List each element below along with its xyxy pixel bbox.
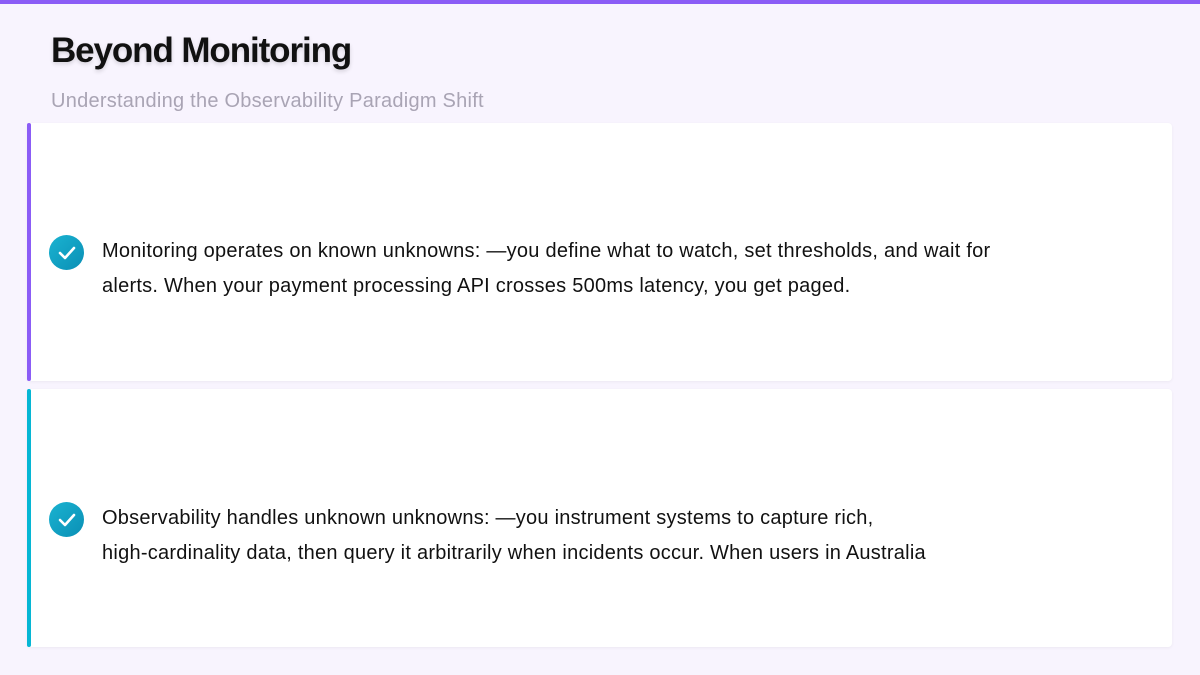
title: Beyond Monitoring — [51, 31, 351, 70]
text: monitoring — [102, 240, 990, 297]
text: observability — [102, 507, 926, 564]
panel: monitoring — [27, 123, 1172, 381]
icon: check — [49, 502, 84, 537]
text: observability: high-cardinality data, then query it arbitrarily when incidents occur. When users in Australia — [102, 542, 926, 564]
icon: check — [49, 235, 84, 270]
subtitle: Understanding the Observability Paradigm Shift — [51, 90, 484, 112]
text: observability: Observability handles unknown unknowns: —you instrument systems to capture rich, — [102, 507, 873, 529]
text: monitoring: Monitoring operates on known unknowns: —you define what to watch, set thresholds, and wait for — [102, 240, 990, 262]
panel: observability — [27, 389, 1172, 647]
text: monitoring: alerts. When your payment processing API crosses 500ms latency, you get paged. — [102, 275, 850, 297]
